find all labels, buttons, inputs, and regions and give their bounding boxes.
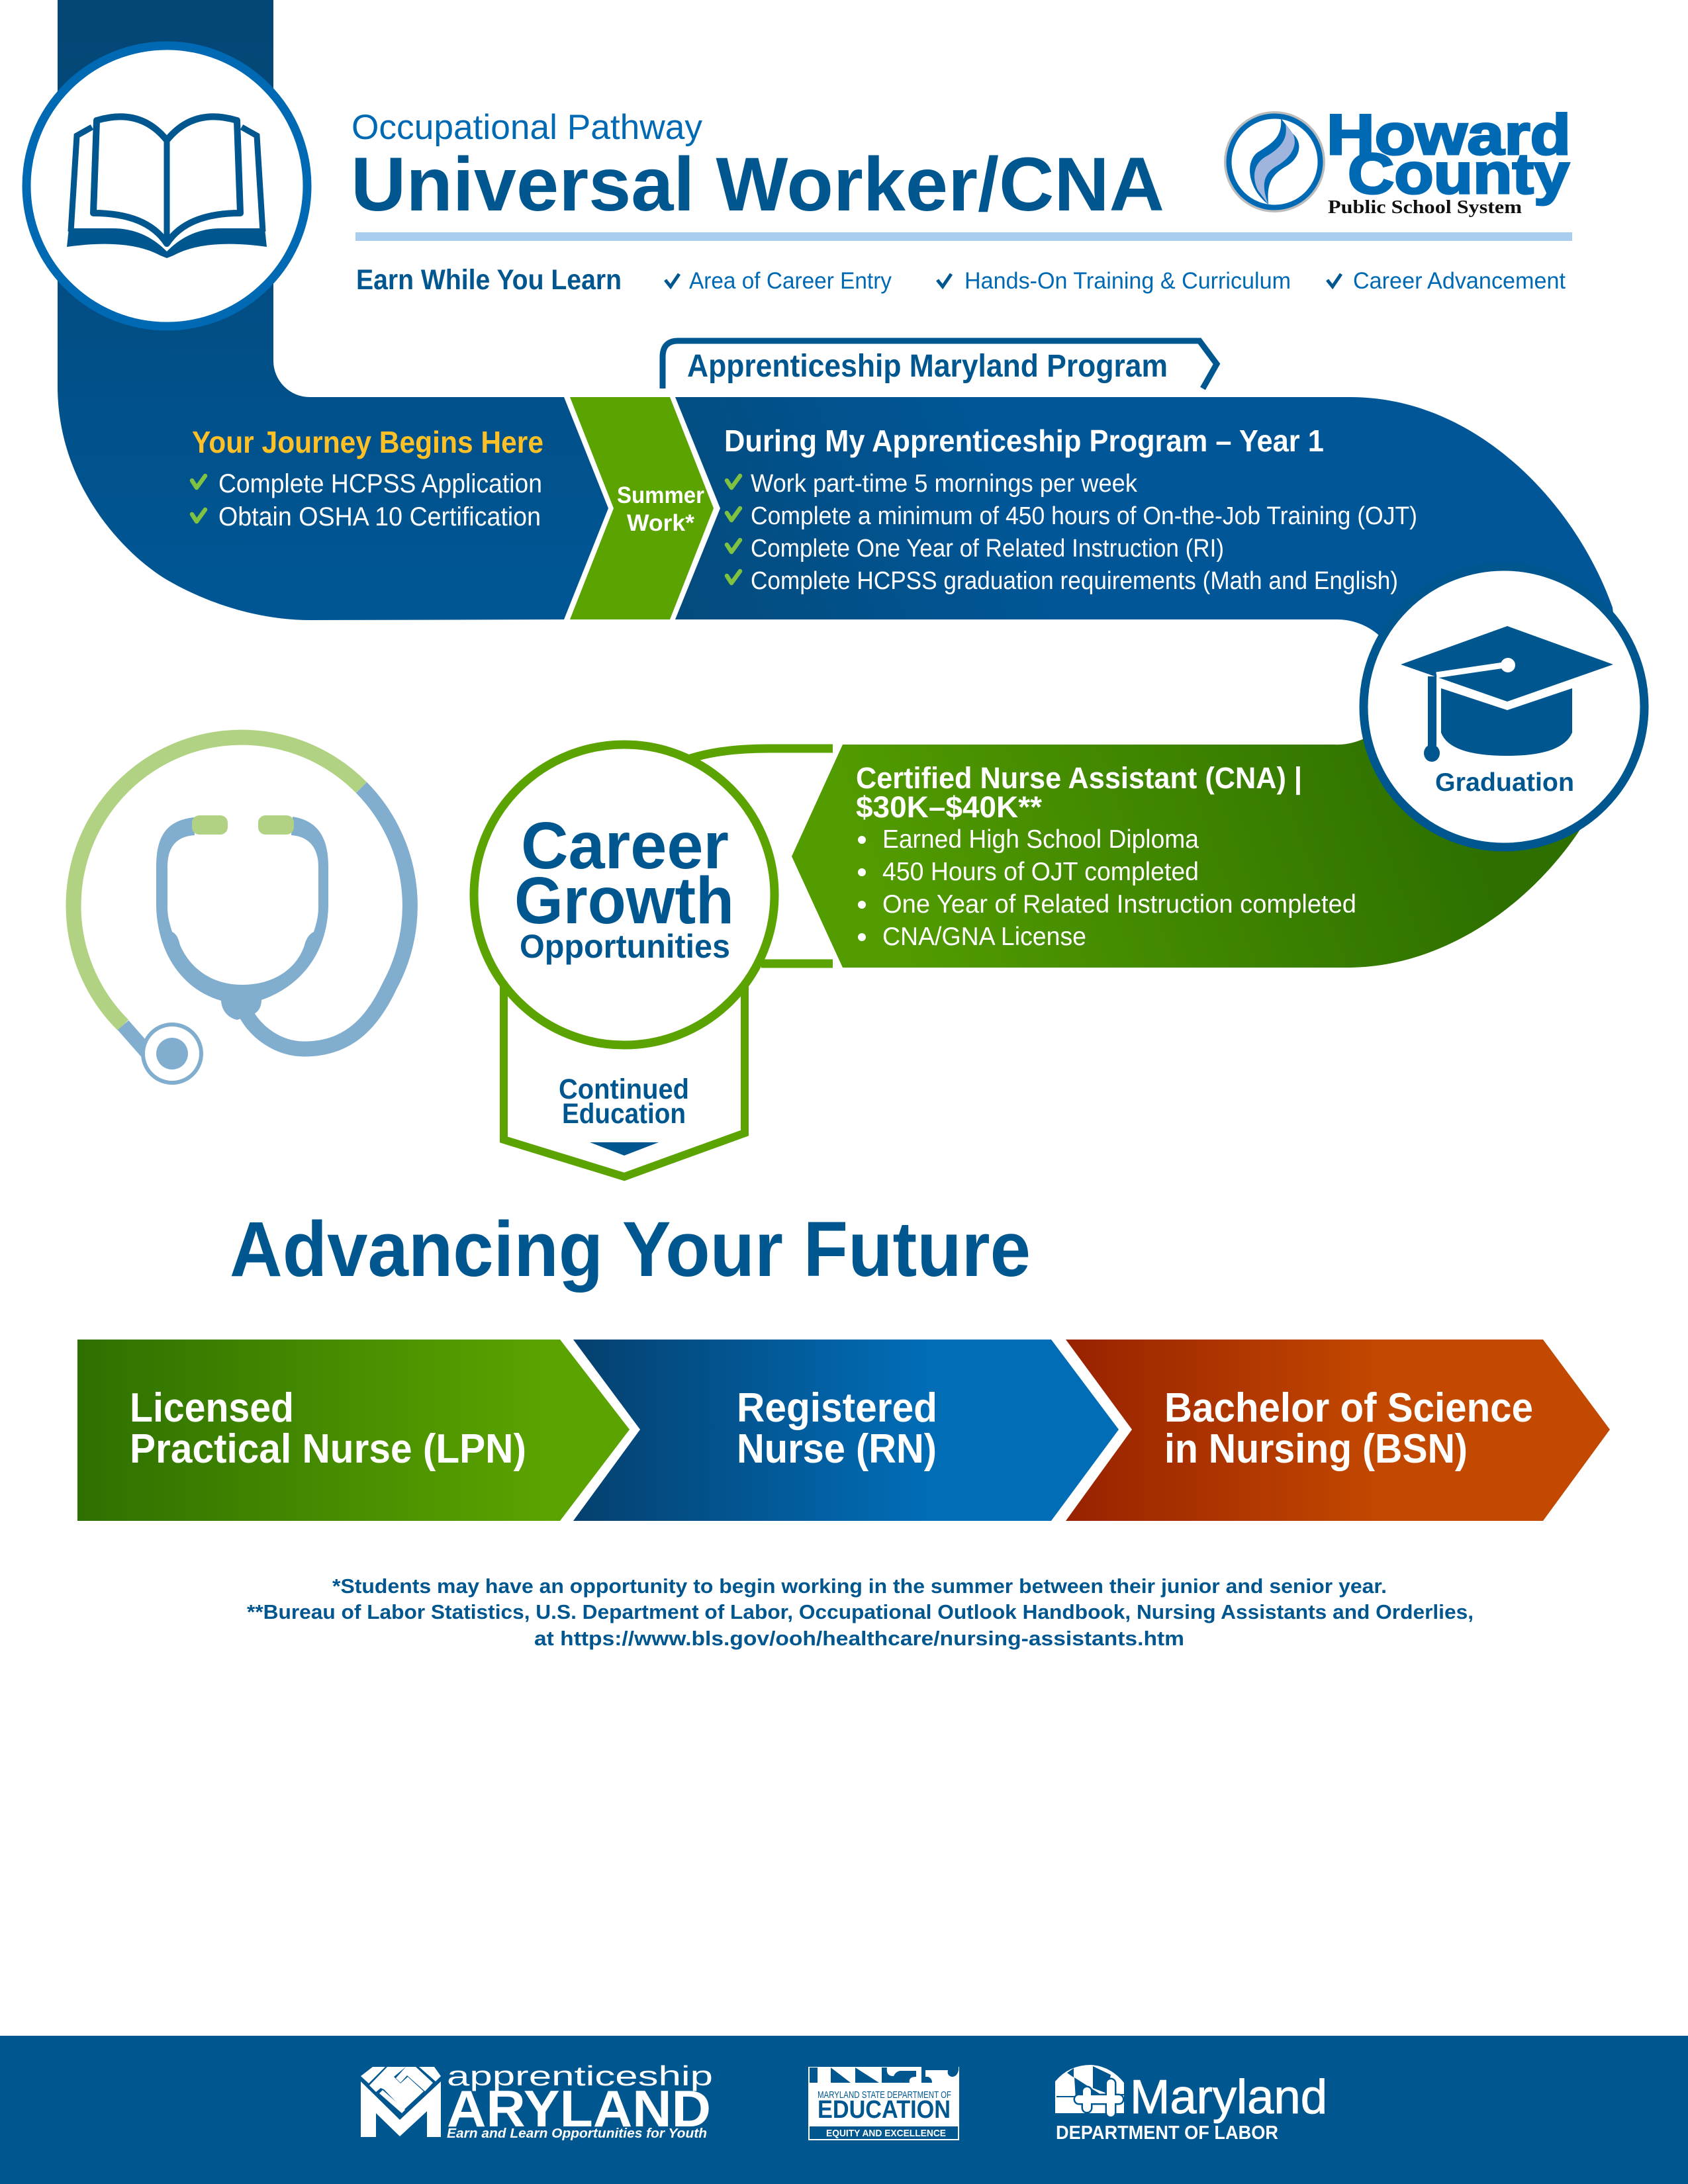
arrow: LPN <box>77 1340 630 1521</box>
career growth connectors <box>690 749 833 964</box>
continued education ribbon: Education <box>562 1098 686 1130</box>
journey begins text block <box>192 425 543 531</box>
journey begins text block: Obtain OSHA 10 Certification <box>218 502 541 531</box>
career growth circle: Opportunities <box>520 928 730 965</box>
journey begins text block: Complete HCPSS Application <box>218 469 542 498</box>
arrow: RN: Registered <box>737 1385 937 1431</box>
earn while you learn row: Area of Career Entry <box>689 268 892 294</box>
logo: Maryland Department of Labor: DEPARTMENT OF LABOR <box>1056 2122 1278 2144</box>
career growth circle: Growth <box>514 864 734 938</box>
logo: Apprenticeship Maryland: apprenticeship <box>447 2060 713 2091</box>
logo: Apprenticeship Maryland: ARYLAND <box>447 2079 711 2138</box>
logo: Apprenticeship Maryland: Earn and Learn Opportunities for Youth <box>447 2126 707 2141</box>
apprenticeship program tab: Apprenticeship Maryland Program <box>687 349 1168 384</box>
logo: Maryland State Department of Education: MARYLAND STATE DEPARTMENT OF <box>818 2089 951 2101</box>
apprenticeship year 1 band <box>675 397 1622 682</box>
earn while you learn row: Earn While You Learn <box>356 264 622 296</box>
icon: graduation cap <box>1364 567 1644 847</box>
continued education ribbon <box>504 979 745 1177</box>
earn while you learn row <box>356 264 1566 296</box>
arrow: BSN <box>1066 1340 1610 1521</box>
credential panel: CNA <box>792 682 1622 968</box>
logo: Maryland Department of Labor <box>1055 2065 1327 2144</box>
summer work chevron: Work* <box>627 510 694 536</box>
summer work chevron: Summer <box>617 482 704 508</box>
earn while you learn row: Hands-On Training & Curriculum <box>964 268 1291 294</box>
during apprenticeship text block: Complete a minimum of 450 hours of On-the-Job Training (OJT) <box>751 502 1417 530</box>
heading: advancing your future: Advancing Your Future <box>230 1206 1031 1293</box>
arrow: RN: Nurse (RN) <box>737 1426 937 1472</box>
title: Universal Worker/CNA <box>351 142 1164 227</box>
during apprenticeship text block: Complete One Year of Related Instruction (RI) <box>751 535 1224 563</box>
logo: Howard County: Public School System <box>1328 197 1522 218</box>
icon: graduation cap: Graduation <box>1435 768 1574 797</box>
credential panel: CNA: CNA/GNA License <box>882 923 1086 951</box>
arrow: LPN: Licensed <box>130 1385 294 1431</box>
logo: Howard County: County <box>1348 142 1570 206</box>
logo: Howard County: Howard <box>1327 103 1571 167</box>
credential panel: CNA: 450 Hours of OJT completed <box>882 858 1199 886</box>
logo: Apprenticeship Maryland <box>361 2060 713 2141</box>
journey begins text block: Your Journey Begins Here <box>192 425 543 459</box>
logo: Howard County <box>1224 103 1571 218</box>
apprenticeship program tab <box>663 341 1217 388</box>
summer work chevron <box>570 397 714 619</box>
credential panel: CNA: Certified Nurse Assistant (CNA) | <box>856 761 1302 796</box>
footnotes: at https://www.bls.gov/ooh/healthcare/nursing-assistants.htm <box>534 1627 1184 1650</box>
arrow: BSN: in Nursing (BSN) <box>1164 1426 1468 1472</box>
heading: occupational pathway: Occupational Pathway <box>352 108 702 147</box>
career growth circle <box>474 745 774 1045</box>
during apprenticeship text block: Work part-time 5 mornings per week <box>751 470 1138 498</box>
footer bar <box>0 2036 1688 2184</box>
arrow: BSN: Bachelor of Science <box>1164 1385 1533 1431</box>
logo: Maryland State Department of Education <box>808 2067 959 2140</box>
logo: Maryland Department of Labor: Maryland <box>1130 2071 1327 2124</box>
credential panel: CNA: $30K–$40K** <box>856 790 1042 824</box>
footnotes <box>247 1574 1474 1650</box>
logo: Maryland State Department of Education: EDUCATION <box>818 2096 951 2124</box>
arrow: RN <box>573 1340 1119 1521</box>
credential panel: CNA: Earned High School Diploma <box>882 825 1199 854</box>
rule <box>355 232 1572 241</box>
footnotes: **Bureau of Labor Statistics, U.S. Department of Labor, Occupational Outlook Handbook, Nursing Assistants and Orderlies, <box>247 1600 1474 1623</box>
during apprenticeship text block: Complete HCPSS graduation requirements (Math and English) <box>751 567 1398 595</box>
during apprenticeship text block: During My Apprenticeship Program – Year 1 <box>724 424 1324 458</box>
icon: open book <box>26 46 307 326</box>
during apprenticeship text block <box>724 424 1417 595</box>
earn while you learn row: Career Advancement <box>1353 268 1566 294</box>
arrow: LPN: Practical Nurse (LPN) <box>130 1426 526 1472</box>
continued education ribbon: Continued <box>559 1073 689 1105</box>
left pathway band <box>58 0 608 620</box>
career growth circle: Career <box>521 809 729 883</box>
logo: Maryland State Department of Education: EQUITY AND EXCELLENCE <box>826 2128 946 2139</box>
icon: stethoscope <box>73 737 410 1083</box>
footnotes: *Students may have an opportunity to begin working in the summer between their junior and senior year. <box>332 1574 1387 1598</box>
credential panel: CNA: One Year of Related Instruction completed <box>882 890 1356 919</box>
